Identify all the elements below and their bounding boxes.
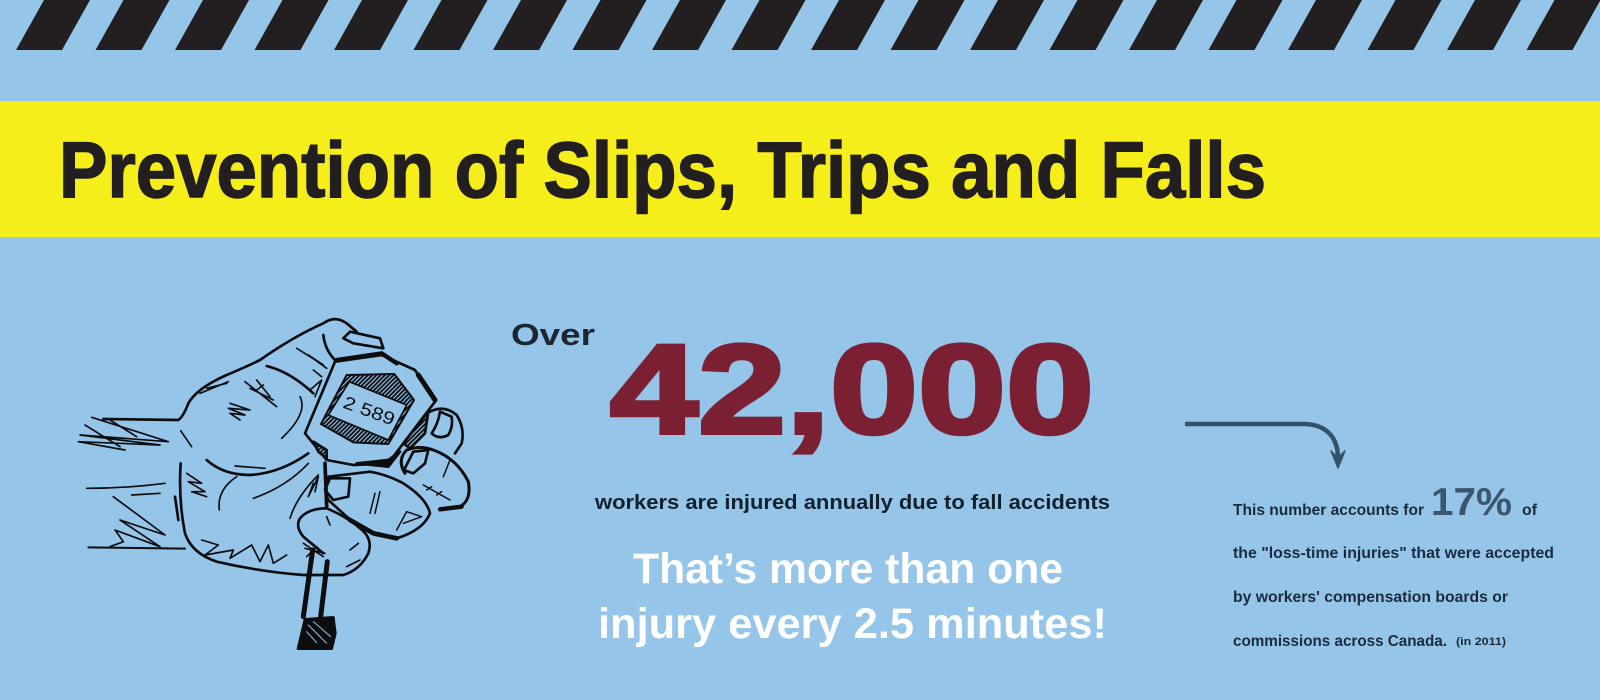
stopwatch reading: 2 589 — [341, 392, 398, 429]
icon: hand gripping stopwatch — [78, 319, 469, 649]
injuries statement: workers are injured annually due to fall accidents — [594, 492, 1110, 514]
white callout: injury every 2.5 minutes! — [598, 600, 1107, 648]
thumb nail — [343, 332, 383, 348]
motion and shading hatches — [78, 348, 360, 567]
stopwatch — [305, 353, 435, 467]
17% figure: 17% — [1431, 481, 1512, 524]
side note: the "loss-time injuries" that were accepted — [1233, 545, 1554, 562]
side note: (in 2011) — [1456, 636, 1506, 648]
"Over" label: Over — [511, 317, 595, 352]
watch strap — [298, 543, 335, 649]
side note: commissions across Canada. — [1233, 633, 1447, 650]
yellow title banner — [0, 101, 1600, 237]
white callout: That’s more than one — [633, 545, 1063, 593]
arrow — [1185, 424, 1345, 468]
fingers — [325, 409, 469, 538]
title: Prevention of Slips, Trips and Falls — [59, 125, 1266, 214]
hazard stripes band — [16, 0, 1600, 50]
hand outline — [103, 319, 370, 575]
side note: of — [1522, 502, 1538, 519]
big number: 42,000 — [610, 318, 1094, 460]
side note — [1233, 481, 1554, 650]
side note: by workers' compensation boards or — [1233, 589, 1508, 606]
white callout — [598, 545, 1107, 648]
side note: This number accounts for — [1233, 502, 1424, 519]
